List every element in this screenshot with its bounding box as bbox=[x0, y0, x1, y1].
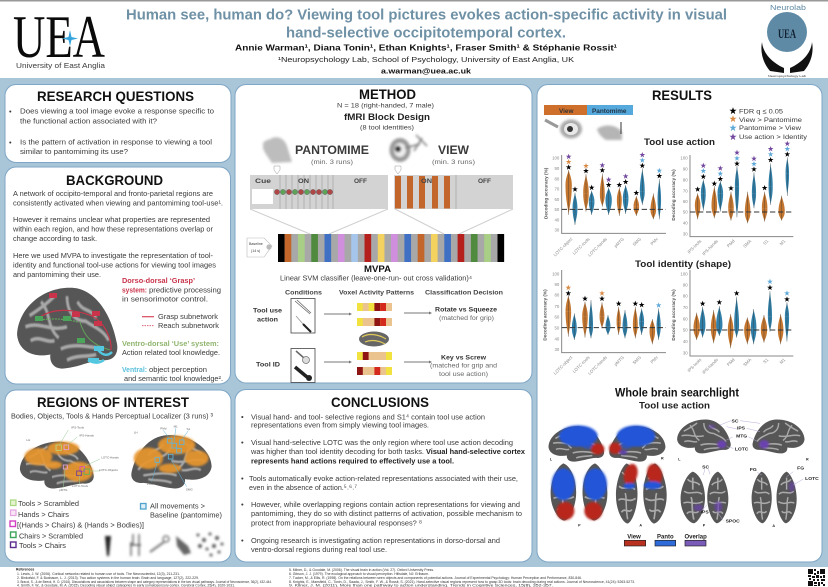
chart: tool identity, ventral regions: SMG bbox=[632, 354, 642, 365]
text: conclusion bullets: Visual hand- and tool- selective regions and S1⁴ contain tool use action bbox=[251, 412, 485, 422]
legend: significance stars: FDR q ≤ 0.05 bbox=[739, 108, 783, 116]
timeline: pantomime run: Cue bbox=[255, 179, 272, 185]
chart: tool use action, ventral regions: LOTC-hands bbox=[587, 236, 608, 258]
title: hand-selective occipitotemporal cortex. bbox=[286, 26, 566, 42]
text: conclusion bullets: However, while overlapping regions contain action representations for viewing and bbox=[251, 500, 520, 509]
subheading: tool identity: Tool identity (shape) bbox=[635, 259, 731, 270]
chart: tool identity, dorsal regions: S1 bbox=[762, 357, 770, 364]
legend: systems: Reach subnetwork bbox=[158, 321, 219, 330]
brain: view and panto anterior bbox=[616, 462, 667, 524]
timeline: pantomime run bbox=[250, 175, 388, 209]
labels: searchlight regions: L bbox=[678, 457, 681, 461]
chart: tool identity, ventral regions: 90 bbox=[555, 282, 560, 287]
text: conclusion bullets: pantomiming, they do so with distinct patterns of activation, possible mechanism to bbox=[251, 509, 522, 518]
brain: left lateral: LOTC-Tools bbox=[72, 484, 88, 488]
chart: tool use action, ventral regions: 90 bbox=[555, 166, 560, 171]
brain: left lateral bbox=[20, 426, 119, 492]
labels: searchlight regions: R bbox=[661, 457, 664, 461]
chart: tool identity, dorsal regions: 100 bbox=[680, 272, 688, 277]
chart: tool identity, ventral regions: LOTC-tools bbox=[572, 355, 591, 374]
chart: tool use action, ventral regions: 70 bbox=[555, 187, 560, 192]
chart: tool use action, dorsal regions bbox=[671, 141, 793, 256]
labels: searchlight regions bbox=[550, 418, 819, 528]
chart: tool identity, ventral regions: 70 bbox=[555, 304, 560, 309]
legend: systems: object perception bbox=[149, 365, 207, 374]
legend: significance stars bbox=[729, 107, 808, 141]
references: References bbox=[16, 568, 34, 572]
legend: systems: predictive processing bbox=[149, 286, 221, 294]
labels: searchlight regions: L bbox=[550, 457, 553, 461]
chart: tool use action, ventral regions: LOTC-tools bbox=[572, 236, 591, 256]
chart: tool use action, dorsal regions: 40 bbox=[683, 220, 688, 225]
row: tool ID bbox=[256, 348, 497, 382]
chart: tool use action, dorsal regions: 60 bbox=[683, 199, 688, 204]
references: 3. Bracci, S., & de Beeck, H. O. (2016). Dissociations and associations between shape and category representations in the two visual pathways. Journal of Neuroscience, 36(2), 432-444. bbox=[17, 580, 272, 584]
chart: tool identity, dorsal regions: M1 bbox=[779, 357, 787, 365]
chart: tool use action, dorsal regions: 80 bbox=[683, 177, 688, 182]
chart: tool use action, dorsal regions: 50 bbox=[683, 210, 688, 215]
chart: tool identity, dorsal regions: 90 bbox=[683, 283, 688, 288]
text: background: Here we used MVPA to investigate the representation of tool- bbox=[13, 251, 214, 260]
icons: stimulus examples bbox=[105, 532, 224, 556]
chart: tool use action, dorsal regions: Decoding accuracy (%) bbox=[671, 169, 676, 221]
chart: tool identity, ventral regions: 80 bbox=[555, 293, 560, 298]
labels: searchlight regions: FG bbox=[750, 467, 757, 473]
legend: ROI contrasts bbox=[10, 499, 222, 550]
legend: ROI contrasts: All movements > bbox=[150, 502, 206, 510]
authors: Annie Warman¹, Diana Tonin¹, Ethan Knights¹, Fraser Smith¹ & Stéphanie Rossit¹ bbox=[235, 42, 617, 52]
heading: regions of interest: REGIONS OF INTEREST bbox=[37, 394, 189, 410]
affiliation: ¹Neuropsychology Lab, School of Psychology, University of East Anglia, UK bbox=[278, 55, 574, 64]
text: conclusion bullets: represents hand actions required to effectively use a tool. bbox=[251, 456, 454, 466]
legend: systems: Dorso-dorsal ‘Grasp’ bbox=[122, 276, 195, 285]
text: conclusion bullets: Visual hand-selective LOTC was the only region where tool use action decoding bbox=[251, 438, 513, 447]
row: tool ID: Tool ID bbox=[256, 362, 280, 368]
key: view and pantomime: View bbox=[559, 108, 573, 115]
panel: research questions bbox=[5, 84, 231, 162]
panel: background bbox=[5, 167, 230, 384]
heading: method: METHOD bbox=[359, 86, 416, 102]
row: tool ID: Key vs Screw bbox=[441, 354, 487, 362]
chart: tool use action, dorsal regions: 100 bbox=[680, 155, 688, 160]
legend: overlap colours bbox=[624, 535, 707, 546]
legend: systems: system: bbox=[122, 286, 147, 294]
chart: tool use action, ventral regions: 60 bbox=[555, 197, 560, 202]
icon: brain pattern bbox=[359, 332, 389, 346]
chart: tool identity, dorsal regions: 30 bbox=[683, 350, 688, 355]
labels: searchlight regions: LOTC bbox=[735, 447, 749, 453]
legend: systems: in sensorimotor control. bbox=[122, 294, 208, 304]
text: research questions: • bbox=[9, 107, 12, 116]
label: pantomime bbox=[295, 143, 369, 166]
chart: tool identity, dorsal regions: SMA bbox=[742, 357, 752, 367]
text: conclusion bullets: ventro-dorsal regions during real tool use. bbox=[251, 545, 387, 554]
text: sample: N = 18 (right-handed, 7 male) bbox=[337, 102, 434, 110]
label: view bbox=[432, 143, 475, 166]
chart: tool identity, dorsal regions: 80 bbox=[683, 294, 688, 299]
legend: ROI contrasts: Chairs > Scrambled bbox=[19, 532, 83, 540]
text: conclusion bullets: • bbox=[241, 500, 244, 509]
chart: tool identity, ventral regions: 100 bbox=[552, 272, 560, 277]
chart: tool use action, ventral regions: 80 bbox=[555, 176, 560, 181]
legend: ROI contrasts: Tools > Scrambled bbox=[18, 499, 79, 508]
labels: searchlight regions: SPOC bbox=[726, 518, 740, 524]
chart: tool identity, dorsal regions: IPS-hands bbox=[701, 357, 719, 375]
chart: tool identity, dorsal regions: Decoding accuracy (%) bbox=[671, 289, 676, 341]
subheading: whole brain searchlight: Whole brain searchlight bbox=[615, 386, 739, 400]
chart: tool use action, dorsal regions: S1 bbox=[762, 238, 770, 246]
panel: regions of interest bbox=[5, 390, 231, 562]
subheading: tool use action searchlight: Tool use action bbox=[639, 400, 710, 412]
legend: ROI contrasts: Hands > Chairs bbox=[18, 510, 69, 519]
legend: systems: Action related tool knowledge. bbox=[122, 348, 220, 357]
text: conclusion bullets: • bbox=[241, 536, 244, 545]
chart: tool use action, ventral regions: pMTG bbox=[613, 236, 625, 249]
labels: searchlight regions: LOTC bbox=[805, 476, 819, 482]
brain: right lateral bbox=[131, 425, 212, 491]
text: conclusion bullets: • bbox=[241, 438, 244, 447]
labels: searchlight regions: P bbox=[703, 523, 706, 527]
chart: tool identity, dorsal regions: PMd bbox=[726, 357, 736, 367]
brains: searchlight maps bbox=[548, 418, 819, 546]
legend: significance stars: View > Pantomime bbox=[739, 117, 802, 124]
timeline: view run: ON bbox=[421, 179, 432, 185]
text: tool identities: (8 tool identities) bbox=[360, 124, 414, 132]
references: 7. Tucker, M., & Ellis, R. (1998). On the relations between seen objects and components of potential actions. Journal of Experimental Psychology: Human Perception and Performance, 830-846. bbox=[289, 576, 582, 580]
chart: tool identity, ventral regions: PMv bbox=[649, 354, 660, 364]
chart: tool use action, ventral regions: PMv bbox=[649, 236, 660, 246]
text: background: within each region, and how these representations overlap or bbox=[12, 224, 214, 234]
label: pantomime: PANTOMIME bbox=[295, 143, 369, 157]
text: background: change according to task. bbox=[13, 234, 97, 243]
legend: systems: Ventro-dorsal ‘Use’ system: bbox=[122, 339, 219, 348]
block sequence strip bbox=[278, 234, 504, 262]
references: 6. Gibson, J. J. (1979). The ecological approach to visual perception. Hillsdale, NJ: Erlbaum. bbox=[289, 572, 429, 576]
chart: tool use action, dorsal regions: SMA bbox=[742, 238, 752, 249]
chart: tool use action, ventral regions: 30 bbox=[555, 228, 560, 233]
labels: searchlight regions: SC bbox=[732, 418, 739, 424]
chart: tool identity, ventral regions: 30 bbox=[555, 347, 560, 352]
email: a.warman@uea.ac.uk bbox=[381, 66, 472, 76]
brain: left lateral: IPS-Hands bbox=[79, 434, 94, 438]
chart: tool use action, ventral regions bbox=[543, 152, 666, 258]
labels: searchlight regions: IPS bbox=[701, 509, 709, 515]
labels: searchlight regions: IPS bbox=[737, 426, 746, 432]
table headers: Classification Decision bbox=[425, 290, 503, 296]
text: classifier: Linear SVM classifier (leave-one-run- out cross validation)⁴ bbox=[280, 276, 472, 282]
legend: ROI contrasts: Tools > Chairs bbox=[19, 541, 66, 550]
text: conclusion bullets: Tools automatically evoke action-related representations associated with their use, bbox=[249, 474, 518, 483]
brain: left lateral: LOTC-Hands bbox=[101, 456, 119, 460]
chart: tool identity, ventral regions: LOTC-hands bbox=[587, 355, 608, 376]
text: conclusion bullets: • bbox=[241, 474, 244, 483]
brain: left lateral: LOTC-Objects bbox=[99, 468, 118, 472]
text: research questions: • bbox=[9, 138, 12, 147]
panel: results bbox=[537, 84, 822, 562]
chart: tool identity, ventral regions: 40 bbox=[555, 336, 560, 341]
text: conclusion bullets: representations even from simply viewing tool images. bbox=[251, 420, 429, 430]
brain: right lateral: PMd bbox=[160, 426, 167, 430]
text: background: and pantomiming their use. bbox=[13, 270, 101, 279]
chart: tool identity, ventral regions bbox=[543, 270, 666, 376]
brain: right lateral: LH bbox=[134, 431, 138, 435]
Neurolab logo: Neurolab bbox=[770, 5, 806, 12]
baseline tag: Baseline bbox=[249, 242, 263, 246]
chart: tool identity, ventral regions: Decoding accuracy (%) bbox=[543, 289, 548, 341]
text: background: identity and functional tool-use actions for viewing tool images bbox=[13, 260, 216, 270]
subtitle: localizer: Bodies, Objects, Tools & Hands Perceptual Localizer (3 runs) ³ bbox=[11, 412, 213, 420]
row: tool ID: tool use action) bbox=[439, 371, 488, 378]
annotation leader lines bbox=[701, 421, 803, 521]
brain: left lateral: LH bbox=[26, 438, 30, 442]
brain: overlap posterior bbox=[681, 472, 728, 523]
brain: right lateral: S1 bbox=[186, 427, 190, 431]
icon: view eye bbox=[390, 135, 427, 162]
chart: tool identity, dorsal regions: 40 bbox=[683, 339, 688, 344]
text: background: consistently activated when viewing and pantomiming tool-use¹. bbox=[13, 198, 223, 208]
chart: tool use action, ventral regions: 40 bbox=[555, 218, 560, 223]
Neurolab logo: Neuropsychology Lab bbox=[768, 74, 806, 78]
chart: tool use action, dorsal regions: PMd bbox=[726, 238, 736, 248]
header bbox=[0, 0, 828, 78]
chart: tool use action, dorsal regions: 90 bbox=[683, 167, 688, 172]
panel: conclusions bbox=[235, 390, 532, 562]
chart: tool use action, dorsal regions: IPS-tools bbox=[686, 238, 702, 254]
text: research questions: Does viewing a tool image evoke a response specific to bbox=[20, 106, 214, 116]
timeline: view run bbox=[394, 175, 513, 209]
brain: right lateral: SMG bbox=[186, 487, 193, 491]
references: 1. Lewis, J. W. (2006). Cortical networks related to human use of tools. The Neuroscientist, 12(3), 211-231. bbox=[17, 572, 180, 576]
text: research questions: similar to pantomiming its use? bbox=[20, 147, 128, 156]
legend: systems bbox=[122, 276, 223, 383]
subheading: MVPA: MVPA bbox=[364, 264, 391, 275]
brain: view and panto lateral right bbox=[609, 425, 665, 462]
text: background: A network of occipito-temporal and fronto-parietal regions are bbox=[13, 189, 213, 198]
text: conclusion bullets: protect from inappropriate behavioural responses? ⁸ bbox=[251, 518, 422, 528]
chart: tool use action, dorsal regions: 70 bbox=[683, 188, 688, 193]
chart: tool use action, dorsal regions: M1 bbox=[779, 238, 787, 246]
title: Human see, human do? Viewing tool pictures evokes action-specific activity in visual bbox=[126, 8, 727, 24]
icon: pantomime hand bbox=[263, 137, 292, 163]
text: conclusion bullets: even in the absence of action.⁵˒⁶˒⁷ bbox=[249, 483, 357, 492]
key: view and pantomime: Pantomime bbox=[592, 108, 627, 115]
row: tool use action: (matched for grip) bbox=[439, 315, 494, 322]
labels: searchlight regions: R bbox=[806, 457, 809, 461]
heading: research questions: RESEARCH QUESTIONS bbox=[37, 88, 194, 104]
chart: tool identity, dorsal regions: 70 bbox=[683, 305, 688, 310]
row: tool use action: Rotate vs Squeeze bbox=[435, 306, 497, 314]
chart: tool identity, dorsal regions: 60 bbox=[683, 316, 688, 321]
text: conclusion bullets bbox=[241, 412, 526, 554]
chart: tool identity, ventral regions: 50 bbox=[555, 325, 560, 330]
references: 2. Binkofski, F. & Buxbaum, L. J. (2013). Two action systems in the human brain. Brain and language, 127(2), 222-229. bbox=[17, 576, 199, 580]
brain: left lateral: pMTG bbox=[59, 488, 68, 492]
label: view: (min. 3 runs) bbox=[432, 159, 475, 166]
row: tool ID: (matched for grip and bbox=[430, 362, 497, 370]
chart: tool identity, dorsal regions: IPS-tools bbox=[686, 357, 702, 373]
brain: right lateral: PMv bbox=[147, 482, 153, 486]
UEA logo: University of East Anglia bbox=[16, 61, 105, 70]
title bbox=[126, 8, 727, 42]
chart: tool identity, dorsal regions: 50 bbox=[683, 328, 688, 333]
chart: tool identity, ventral regions: LOTC-object bbox=[552, 354, 574, 376]
panel: method bbox=[235, 84, 532, 383]
text: conclusion bullets: • bbox=[241, 412, 244, 422]
row: tool use action bbox=[253, 298, 497, 333]
legend: ROI contrasts: Baseline (pantomime) bbox=[150, 510, 222, 520]
chart: tool use action, ventral regions: Decoding accuracy (%) bbox=[543, 167, 548, 219]
text: research questions bbox=[9, 106, 214, 156]
brain: left lateral: IPS-Tools bbox=[71, 426, 85, 430]
UEA logo: UEA bbox=[13, 4, 105, 70]
labels: searchlight regions: FG bbox=[797, 465, 804, 471]
timeline: pantomime run: OFF bbox=[354, 179, 367, 185]
text: research questions: the functional action associated with it? bbox=[20, 116, 157, 126]
labels: searchlight regions: A bbox=[639, 523, 642, 527]
brain: right lateral: M1 bbox=[174, 425, 178, 429]
legend: significance stars: Use action > Identity bbox=[739, 134, 808, 141]
table headers: Voxel Activity Patterns bbox=[339, 290, 414, 296]
chart: tool use action, ventral regions: SMG bbox=[632, 236, 642, 247]
baseline tag: (14 s) bbox=[251, 249, 260, 253]
chart: tool use action, ventral regions: 100 bbox=[552, 155, 560, 160]
references: 5. Milner, D., & Goodale, M. (2006). The visual brain in action (Vol. 27). Oxford University Press. bbox=[289, 568, 434, 572]
labels: searchlight regions: SC bbox=[702, 464, 710, 470]
table headers bbox=[285, 290, 503, 296]
chart: tool identity, ventral regions: 60 bbox=[555, 314, 560, 319]
labels: searchlight regions: MTG bbox=[736, 434, 747, 440]
chart: tool identity, dorsal regions bbox=[671, 270, 793, 375]
chart: tool identity, ventral regions: pMTG bbox=[613, 354, 625, 367]
projection lines bbox=[250, 209, 513, 234]
text: conclusion bullets: Visual hand-selective cortex bbox=[426, 447, 526, 456]
brain: view and panto lateral left bbox=[548, 425, 604, 462]
text: research questions: Is the pattern of activation in response to viewing a tool bbox=[20, 138, 212, 146]
subheading: fMRI block design: fMRI Block Design bbox=[344, 112, 430, 122]
timing pin: pantomime bbox=[274, 166, 280, 174]
brain: view and panto posterior bbox=[551, 463, 607, 521]
QR code bbox=[808, 569, 825, 586]
row: tool use action: Tool use bbox=[253, 308, 282, 314]
text: conclusion bullets: Ongoing research is investigating action representations in dorso-dorsal and bbox=[251, 536, 500, 545]
legend: systems: and semantic tool knowledge². bbox=[124, 374, 223, 383]
Neurolab logo: UEA bbox=[778, 26, 796, 41]
labels: searchlight regions: A bbox=[772, 524, 775, 528]
text: background: However it remains unclear what properties are represented bbox=[13, 215, 210, 224]
legend: systems: Ventral: bbox=[122, 365, 147, 374]
row: tool use action: action bbox=[257, 316, 278, 324]
legend: overlap colours: View bbox=[627, 535, 641, 541]
heading: conclusions: CONCLUSIONS bbox=[331, 394, 429, 410]
references: 8. Knights, E., Mansfield, C., Tonin, D., Saada, J., Smith, F. W., & Rossit, S. (2021). Hand-selective visual regions represent how to grasp 3D tools: brain decoding during real actions. Journal of Neuroscience, 41(24): 5263-5273. bbox=[289, 580, 635, 584]
brain: overlap anterior bbox=[752, 472, 797, 523]
timing pin: view bbox=[395, 166, 401, 174]
legend: significance stars: Pantomime > View bbox=[739, 125, 801, 132]
legend: overlap colours: Overlap bbox=[685, 535, 707, 541]
chart: tool use action, ventral regions: 50 bbox=[555, 207, 560, 212]
labels: searchlight regions: P bbox=[578, 523, 581, 527]
legend: systems: Grasp subnetwork bbox=[158, 312, 218, 321]
label: pantomime: (min. 3 runs) bbox=[311, 159, 353, 166]
label: view: VIEW bbox=[438, 143, 470, 157]
key: view and pantomime bbox=[544, 105, 633, 140]
timeline: pantomime run: ON bbox=[298, 179, 309, 185]
chart: tool use action, dorsal regions: IPS-hands bbox=[701, 238, 719, 256]
heading: results: RESULTS bbox=[652, 87, 712, 103]
chart: tool use action, ventral regions: LOTC-object bbox=[552, 236, 574, 257]
table headers: Conditions bbox=[285, 290, 322, 296]
legend: overlap colours: Panto bbox=[657, 535, 674, 541]
legend: ROI contrasts: [(Hands > Chairs) & (Hands > Bodies)] bbox=[17, 520, 144, 530]
brains: ROI maps bbox=[20, 425, 212, 492]
chart: tool use action, dorsal regions: 30 bbox=[683, 232, 688, 237]
timeline: view run: OFF bbox=[478, 179, 491, 185]
heading: background: BACKGROUND bbox=[66, 172, 163, 188]
brain: overlap lateral left bbox=[677, 419, 731, 453]
baseline tag bbox=[247, 238, 272, 257]
text: conclusion bullets: was higher than tool identity decoding for both tasks. bbox=[250, 447, 424, 456]
brain: subnetworks bbox=[17, 288, 117, 369]
Neurolab logo bbox=[761, 5, 813, 78]
subheading: tool use action: Tool use action bbox=[644, 137, 715, 147]
text: background bbox=[12, 189, 223, 279]
references bbox=[16, 568, 635, 587]
brain: overlap lateral right bbox=[753, 419, 805, 453]
